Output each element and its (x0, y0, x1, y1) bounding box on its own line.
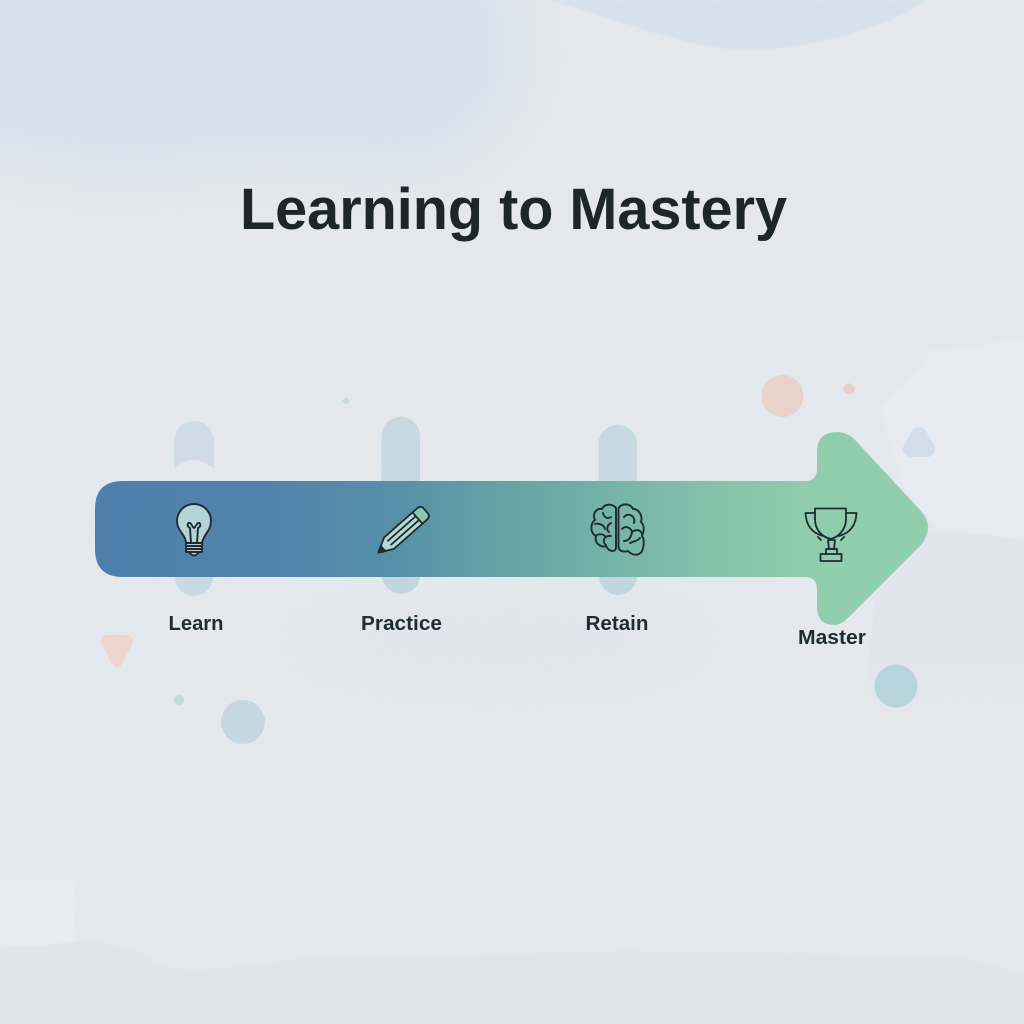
icon: brain (591, 504, 644, 555)
progress arrow (95, 432, 928, 625)
title: Learning to Mastery (240, 177, 787, 242)
label: master: Master (798, 627, 866, 649)
label: practice: Practice (361, 613, 442, 635)
icon: trophy (806, 508, 856, 561)
label: retain: Retain (586, 613, 648, 635)
milestone tab: practice (382, 417, 420, 594)
milestone tab: retain (598, 425, 637, 595)
icon: light bulb (177, 504, 211, 556)
label: learn: Learn (168, 613, 224, 635)
decorative shapes (107, 375, 927, 744)
icon: pencil (374, 505, 431, 558)
milestone tab: learn (174, 421, 214, 596)
